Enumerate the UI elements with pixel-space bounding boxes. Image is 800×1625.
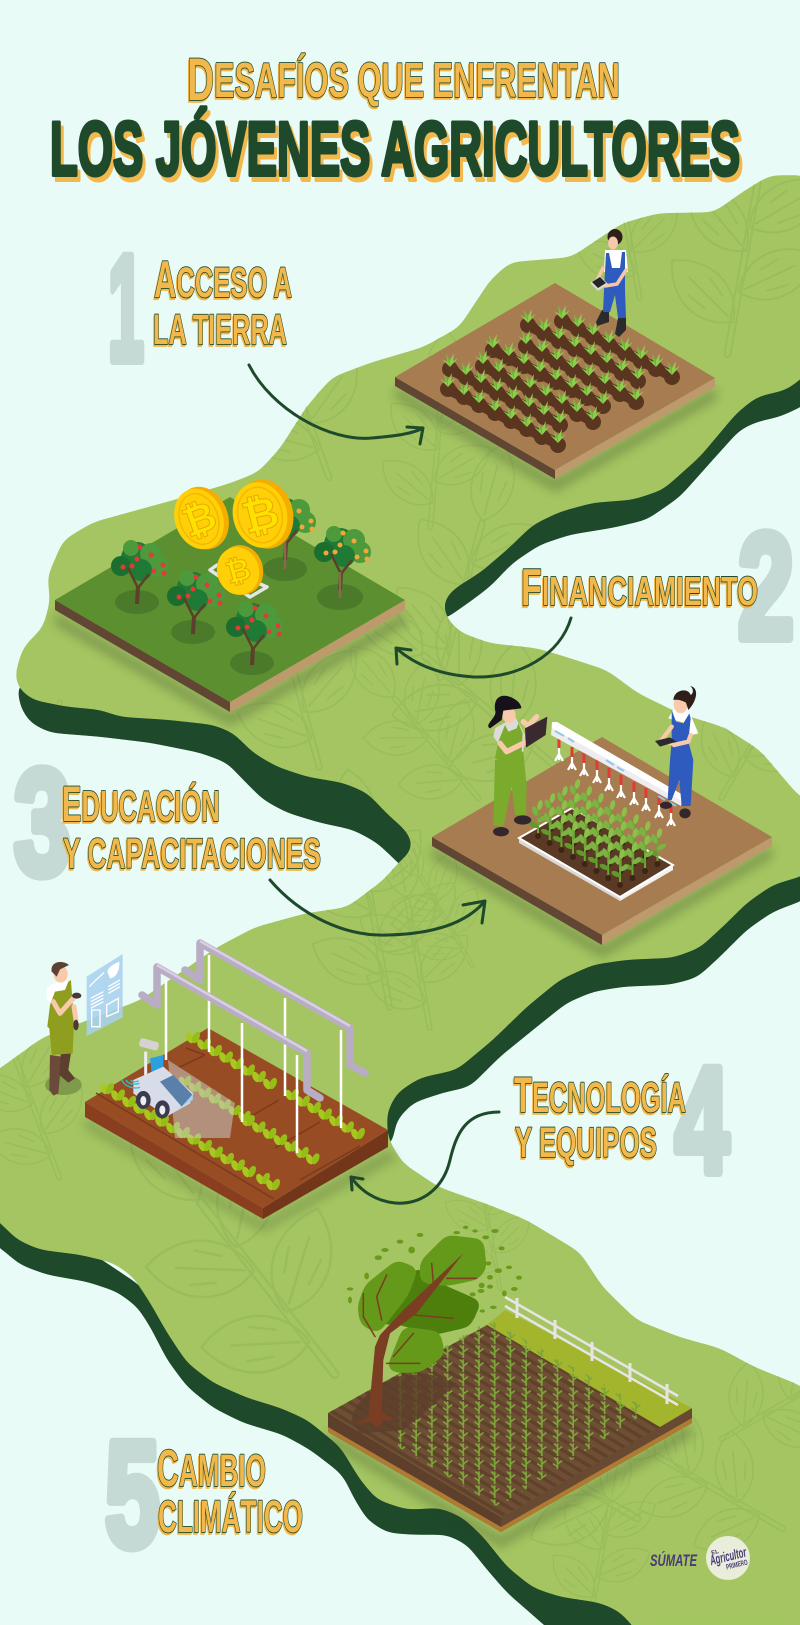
robot (122, 1038, 193, 1118)
trees (111, 496, 371, 665)
isometric plot with planter (432, 686, 772, 958)
logo: el agricultor primero: EL (711, 1549, 720, 1557)
isometric field plot (328, 1226, 692, 1548)
section 5: cambio climático (105, 1226, 692, 1578)
isometric technology plot (85, 941, 398, 1232)
translucent scan beam (168, 1060, 235, 1138)
windblown tree (347, 1226, 522, 1433)
crops (398, 1320, 650, 1507)
arrow to greenhouse plot (270, 880, 485, 935)
farmer with holographic panel (45, 954, 123, 1096)
woman with blue overalls (655, 686, 698, 818)
section 1: acceso a la tierra (108, 224, 716, 492)
label: acceso a la tierra: LA TIERRA (153, 306, 287, 354)
number 5: 5 (105, 1410, 160, 1578)
label: tecnología y equipos: Y EQUIPOS (515, 1119, 657, 1167)
crop sprouts (99, 1031, 367, 1191)
bitcoin coins: ₿ (237, 487, 284, 544)
label: cambio climático (157, 1440, 303, 1542)
logo: el agricultor primero: PRIMERO (725, 1558, 749, 1572)
section 1: acceso a la tierra: 1 (108, 224, 144, 392)
logo: súmate: SÚMATE (650, 1551, 697, 1570)
bitcoin coins: ₿ (177, 494, 223, 546)
bitcoin coins: ₿ (222, 552, 254, 591)
isometric crop plot (395, 283, 716, 492)
planter box (519, 779, 673, 901)
woman with green overalls and tablet (488, 696, 547, 836)
logo: el agricultor primero (706, 1536, 750, 1580)
irrigation bar (551, 722, 683, 826)
bitcoin coins (166, 473, 301, 600)
label: acceso a la tierra: ACCESO A (154, 251, 292, 309)
label: educación y capacitaciones: EDUCACIÓN (62, 776, 220, 832)
label: tecnología y equipos (514, 1067, 686, 1167)
farmer with blue overalls (590, 229, 628, 337)
number 3: 3 (14, 738, 71, 906)
title (50, 46, 740, 192)
label: cambio climático: CLIMÁTICO (158, 1491, 303, 1542)
isometric orchard plot with coins (55, 473, 405, 726)
section 2: financiamiento (55, 473, 794, 726)
arrow to technology plot (351, 1112, 499, 1203)
title line 1: D (187, 46, 214, 113)
number 4: 4 (675, 1036, 729, 1204)
section 4: tecnología y equipos (45, 941, 729, 1232)
arrow to crop plot (249, 365, 423, 444)
white fence (505, 1297, 678, 1405)
logo: el agricultor primero: Agricultor (708, 1543, 749, 1568)
label: educación y capacitaciones (62, 776, 321, 878)
label: cambio climático: CAMBIO (157, 1440, 266, 1498)
section 3: educación y capacitaciones (14, 686, 772, 958)
irrigation pipes and poles (142, 941, 365, 1153)
label: educación y capacitaciones: Y CAPACITACIONES (63, 830, 321, 878)
label: tecnología y equipos: TECNOLOGÍA (514, 1067, 686, 1123)
dark shadow bands under the green path (0, 360, 800, 1625)
arrow to orchard plot (396, 618, 571, 677)
label: acceso a la tierra (153, 251, 292, 354)
